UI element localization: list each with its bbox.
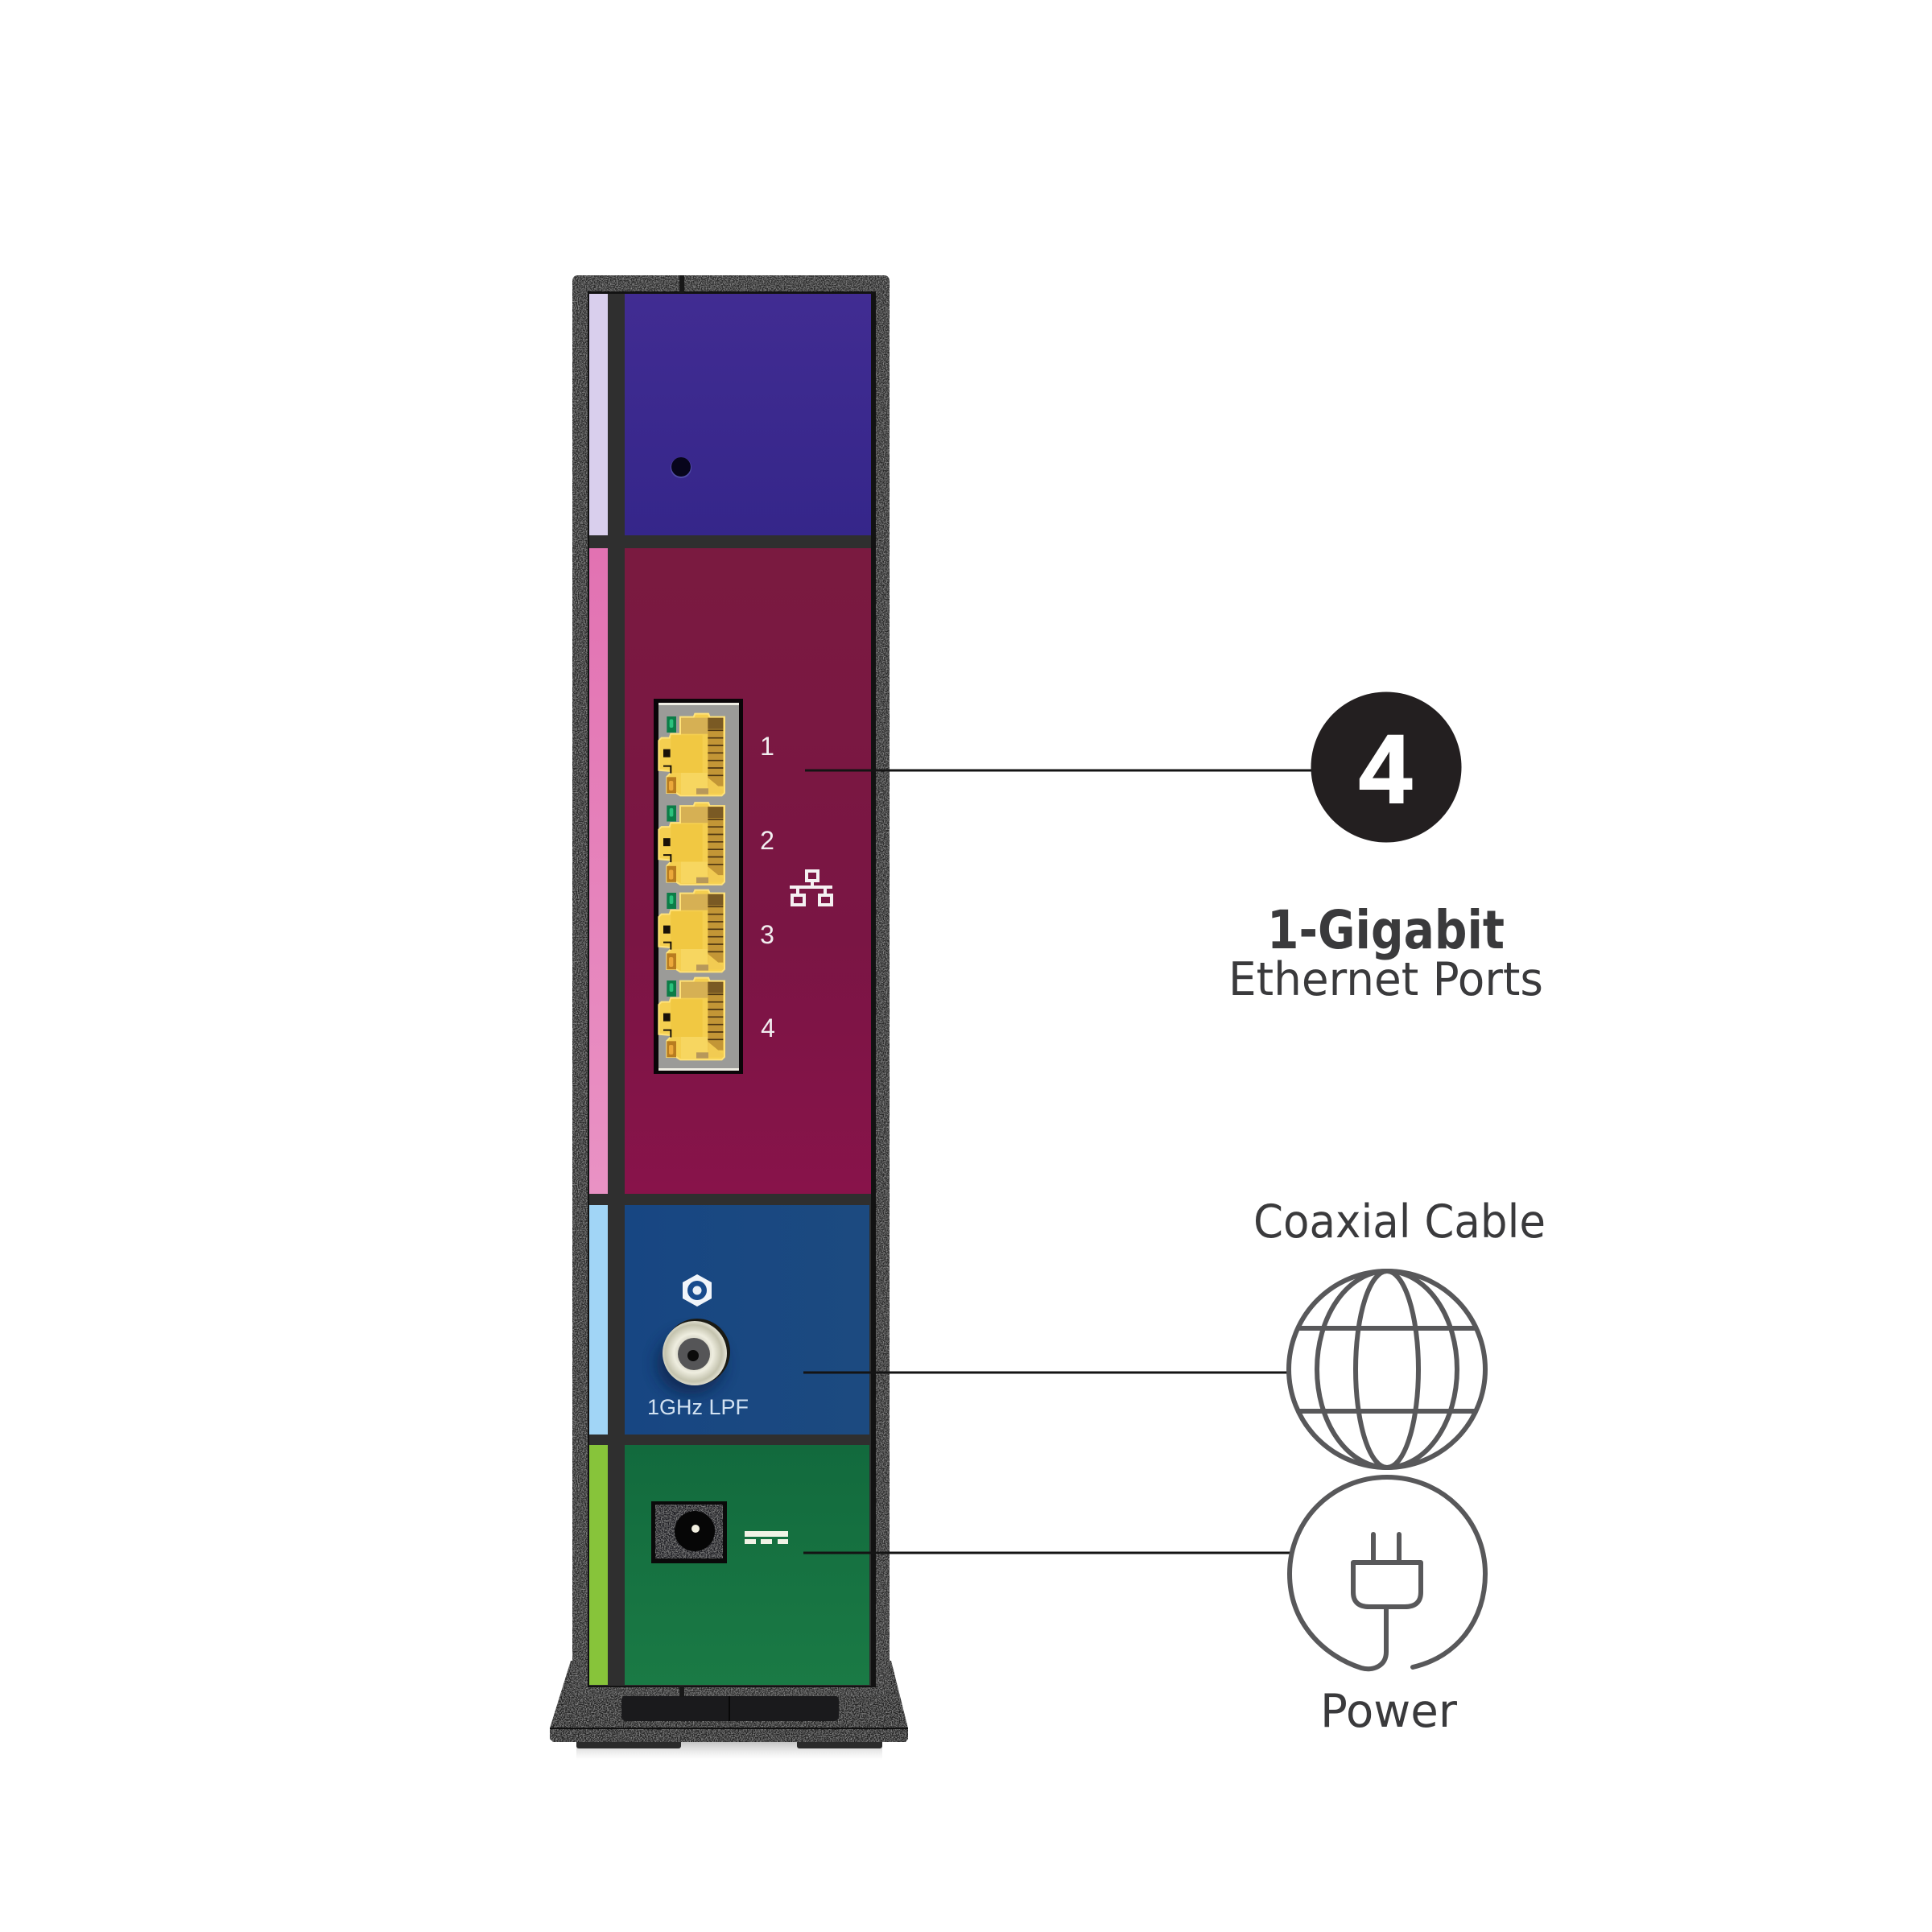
icon: globe (1289, 1271, 1485, 1468)
stand base (550, 1661, 908, 1760)
stripe: light blue (589, 1205, 608, 1435)
stripe: pink (589, 548, 608, 1194)
coax label: 1GHz LPF (647, 1395, 749, 1419)
ethernet port block (654, 699, 743, 1074)
panel: purple reset section (625, 294, 871, 535)
callout: 4 ethernet ports badge (1311, 692, 1462, 842)
port 4 (658, 978, 724, 1059)
stripe: lime (589, 1445, 608, 1685)
icon: coax hexagon (683, 1274, 712, 1307)
device frame (572, 275, 890, 1696)
icon: network (790, 871, 832, 905)
port 3 (658, 890, 724, 972)
panel: coaxial section (625, 1205, 869, 1435)
panel: ethernet section (625, 548, 871, 1194)
icon: DC symbol (745, 1531, 788, 1544)
seam top (679, 275, 684, 293)
inner black edge (588, 291, 876, 1687)
heading: 1-Gigabit: 1-Gigabit (1267, 899, 1505, 961)
label: Coaxial Cable: Coaxial Cable (1253, 1195, 1546, 1249)
port numbers (760, 732, 775, 1042)
leader line: ethernet (805, 770, 1312, 771)
leader line: coaxial (803, 1372, 1290, 1373)
panel: power section (625, 1445, 869, 1685)
modem device (550, 275, 908, 1760)
label: Ethernet Ports: Ethernet Ports (1228, 953, 1543, 1006)
leader line: power (803, 1552, 1291, 1554)
port numbers: 4 (761, 1013, 775, 1042)
power jack (651, 1501, 727, 1563)
port 1 (658, 714, 724, 795)
stripe: lavender (589, 294, 608, 535)
dark inner dividers (589, 294, 871, 1686)
badge number: 4 (1359, 714, 1412, 824)
seam bottom (679, 1686, 684, 1697)
icon: power plug (1290, 1477, 1485, 1669)
port 2 (658, 803, 724, 885)
port numbers: 3 (760, 920, 774, 949)
port numbers: 2 (760, 826, 774, 855)
reset hole (671, 457, 691, 478)
port numbers: 1 (760, 732, 774, 761)
coax connector (657, 1319, 730, 1394)
label: Power: Power (1320, 1685, 1458, 1738)
